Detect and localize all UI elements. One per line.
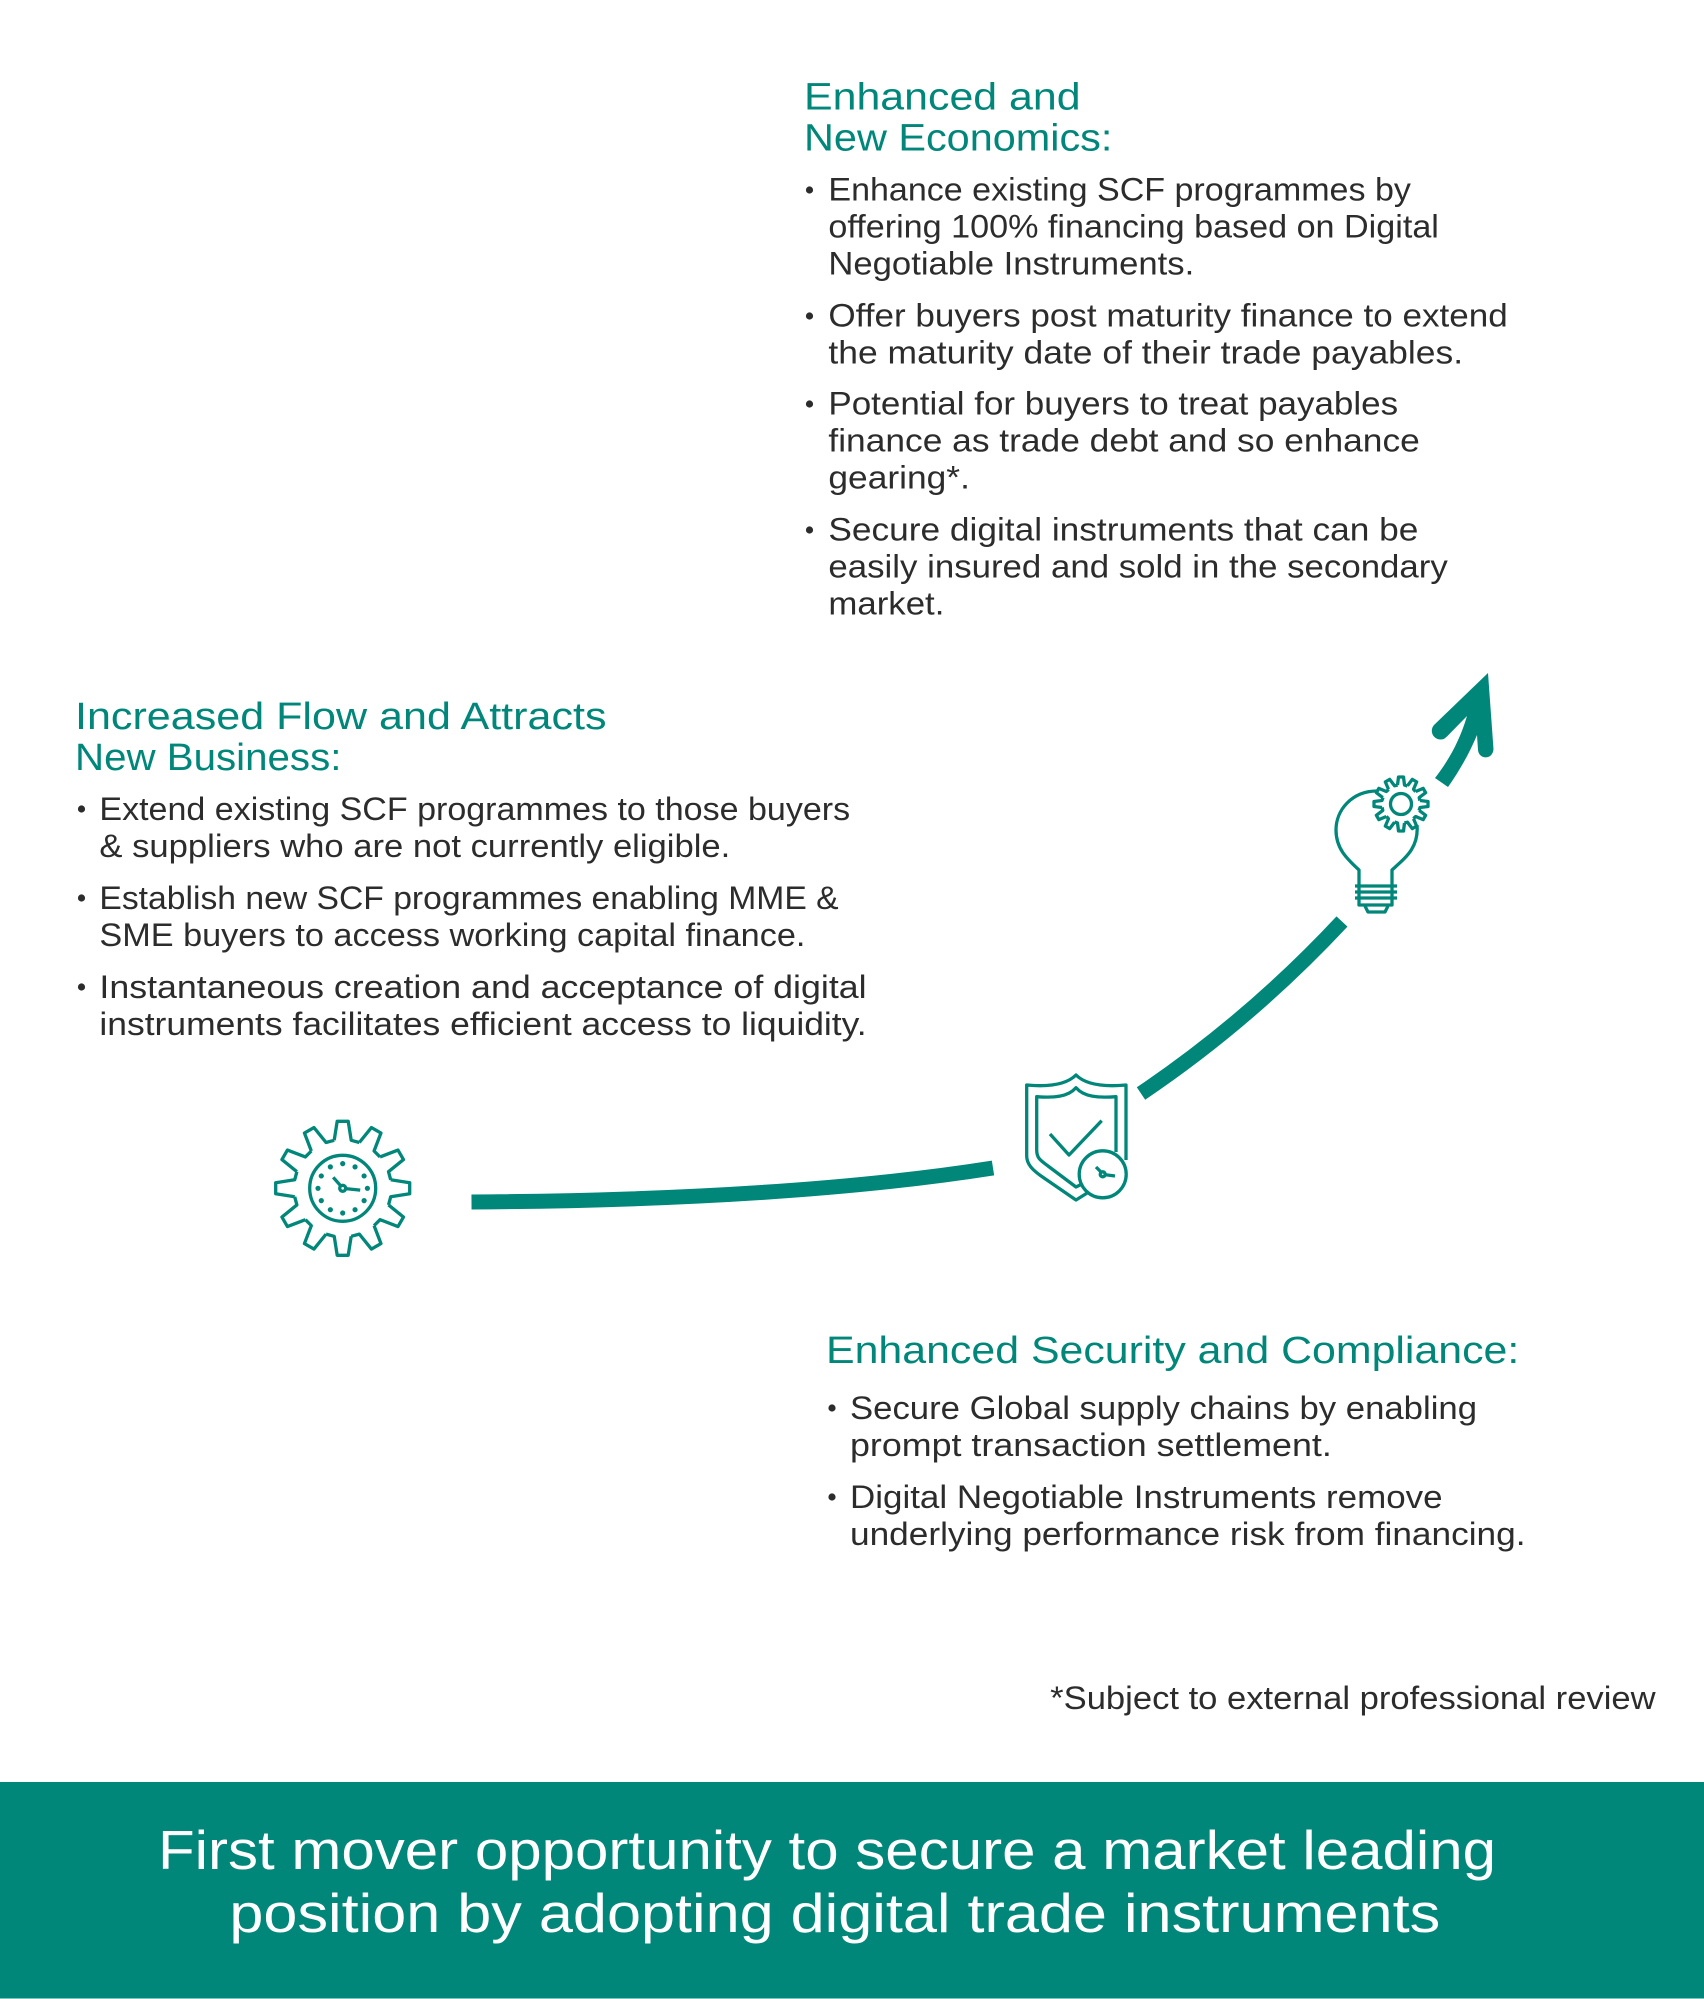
heading: increased flow (75, 696, 606, 779)
bullet: remove performance risk: Digital Negotiable Instruments remove (850, 1479, 1443, 1515)
bullet: instantaneous creation: Instantaneous creation and acceptance of digital (99, 969, 867, 1005)
icon: light bulb with gear (1336, 777, 1428, 912)
arrow segment: gear to shield (472, 1168, 993, 1202)
bullet: new programmes: SME buyers to access working capital finance. (99, 917, 805, 953)
bullet: extend programmes (78, 791, 850, 864)
bullet: remove performance risk: underlying performance risk from financing. (850, 1516, 1526, 1552)
bullet: post maturity finance (806, 298, 1508, 370)
bullet: trade debt: Potential for buyers to treat payables (828, 386, 1398, 422)
bullet: new programmes: Establish new SCF programmes enabling MME & (99, 880, 839, 916)
bullet: secure supply chains: prompt transaction settlement. (850, 1427, 1332, 1463)
panel: increased flow and new business (75, 696, 867, 1042)
heading: increased flow: New Business: (75, 737, 341, 779)
heading: enhanced and new economics (804, 77, 1112, 159)
arrow head with final shaft (1432, 673, 1494, 787)
heading: enhanced security: Enhanced Security and Compliance: (826, 1330, 1519, 1372)
bullet: instantaneous creation: instruments facilitates efficient access to liquidity. (99, 1006, 867, 1042)
bullet: secure digital instruments (806, 512, 1448, 622)
heading: enhanced and new economics: New Economics: (804, 117, 1112, 159)
icon: gear with clock (276, 1121, 410, 1255)
banner: first mover opportunity (0, 1782, 1704, 1998)
bullet: secure digital instruments: Secure digital instruments that can be (828, 512, 1418, 548)
bullet: 100% financing: offering 100% financing based on Digital (828, 208, 1439, 244)
bullet: post maturity finance: Offer buyers post maturity finance to extend (828, 298, 1508, 334)
bullet: secure supply chains (828, 1390, 1477, 1463)
heading: enhanced and new economics: Enhanced and (804, 77, 1081, 119)
arrow segment: shield to bulb (1141, 922, 1342, 1094)
banner: first mover opportunity: position by adopting digital trade instruments (229, 1882, 1440, 1944)
footnote: *Subject to external professional review (1050, 1680, 1657, 1716)
bullet: trade debt (806, 386, 1420, 495)
bullet: secure digital instruments: market. (828, 586, 944, 622)
panel: enhanced and new economics (804, 77, 1508, 622)
panel: enhanced security and compliance (826, 1330, 1526, 1552)
bullet: secure supply chains: Secure Global supply chains by enabling (850, 1390, 1477, 1426)
icon: shield with check and clock (1027, 1075, 1126, 1200)
bullet: new programmes (78, 880, 839, 953)
bullet: trade debt: finance as trade debt and so enhance (828, 422, 1420, 458)
bullet: extend programmes: & suppliers who are not currently eligible. (99, 828, 730, 864)
banner: first mover opportunity: First mover opportunity to secure a market leading (158, 1819, 1496, 1881)
bullet: trade debt: gearing*. (828, 459, 970, 495)
bullet: extend programmes: Extend existing SCF programmes to those buyers (99, 791, 850, 827)
bullet: 100% financing (806, 171, 1439, 281)
bullet: instantaneous creation (78, 969, 867, 1042)
bullet: post maturity finance: the maturity date of their trade payables. (828, 334, 1463, 370)
bullet: secure digital instruments: easily insured and sold in the secondary (828, 549, 1448, 585)
bullet: remove performance risk (828, 1479, 1526, 1552)
heading: increased flow: Increased Flow and Attracts (75, 696, 606, 738)
bullet: 100% financing: Enhance existing SCF programmes by (828, 171, 1411, 207)
bullet: 100% financing: Negotiable Instruments. (828, 245, 1194, 281)
